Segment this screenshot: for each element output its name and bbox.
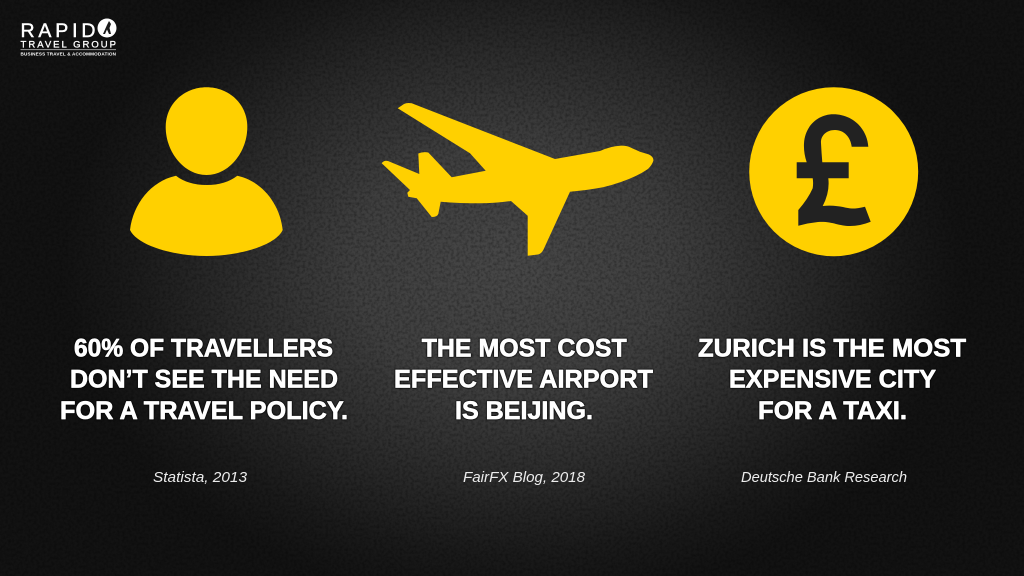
heading: taxi statistic xyxy=(698,335,966,425)
heading: airport statistic: EFFECTIVE AIRPORT xyxy=(394,366,653,394)
logo: Rapid Travel Group: TRAVEL GROUP xyxy=(20,40,116,51)
source: Deutsche Bank: Deutsche Bank Research xyxy=(741,469,907,486)
heading: taxi statistic: FOR A TAXI. xyxy=(758,397,907,425)
heading: travellers statistic: FOR A TRAVEL POLICY. xyxy=(60,397,348,425)
panel: taxi xyxy=(698,87,966,486)
source: FairFX: FairFX Blog, 2018 xyxy=(463,469,586,486)
heading: taxi statistic: EXPENSIVE CITY xyxy=(729,366,936,394)
panel: travellers xyxy=(60,87,348,486)
heading: travellers statistic: DON’T SEE THE NEED xyxy=(70,366,338,394)
icon: logo roundel xyxy=(98,18,116,38)
heading: airport statistic: THE MOST COST xyxy=(422,335,627,363)
icon: person xyxy=(130,87,283,256)
icon: airplane xyxy=(382,103,653,256)
logo: Rapid Travel Group: RAPID xyxy=(20,20,96,42)
heading: airport statistic xyxy=(394,335,653,425)
heading: travellers statistic: 60% OF TRAVELLERS xyxy=(74,335,333,363)
heading: travellers statistic xyxy=(60,335,348,425)
logo: Rapid Travel Group xyxy=(20,18,117,56)
logo: Rapid Travel Group: BUSINESS TRAVEL & ACCOMMODATION xyxy=(20,51,117,56)
heading: airport statistic: IS BEIJING. xyxy=(455,397,593,425)
panel: airport xyxy=(382,103,653,486)
heading: taxi statistic: ZURICH IS THE MOST xyxy=(698,335,966,363)
source: Statista: Statista, 2013 xyxy=(153,469,248,486)
icon: pound coin xyxy=(749,87,918,256)
